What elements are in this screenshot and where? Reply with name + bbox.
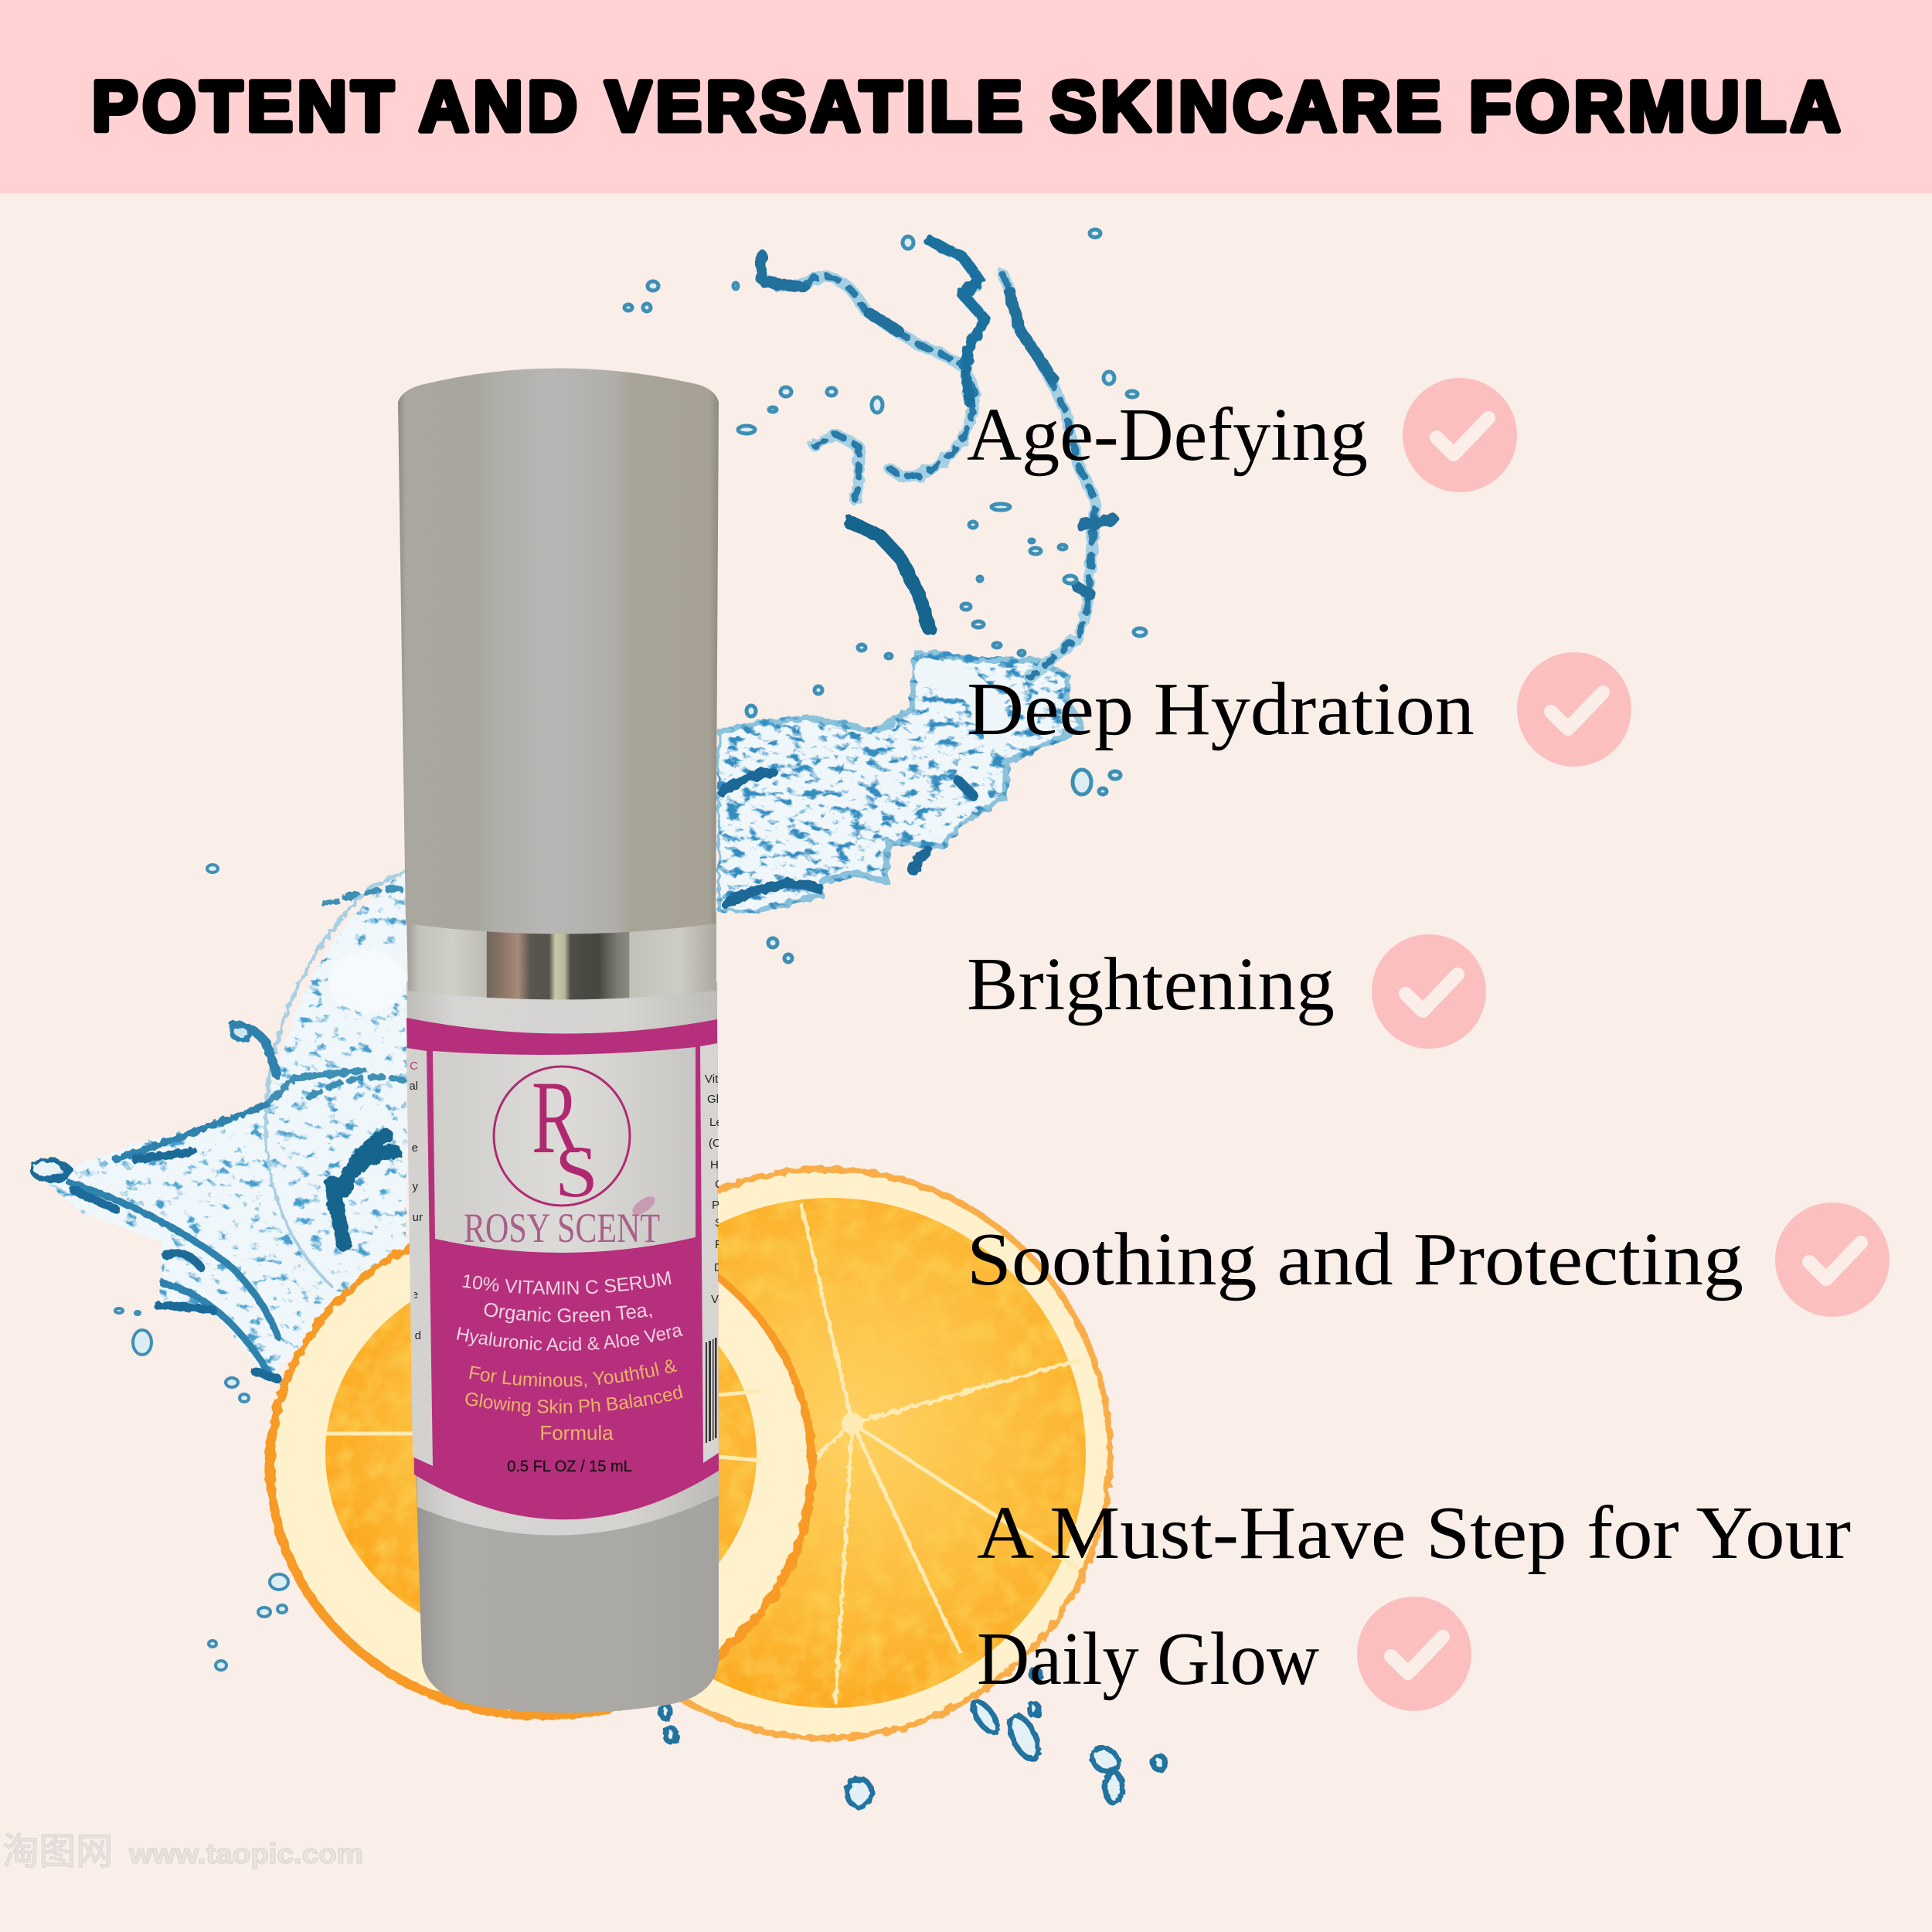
side strip small print: (Orga — [709, 1137, 739, 1150]
side strip small print: ne — [405, 1141, 418, 1155]
title: POTENT AND VERSATILE SKINCARE FORMULA — [92, 67, 1845, 146]
water droplets: left — [115, 865, 288, 1670]
side strip small print: Hyal — [710, 1158, 733, 1172]
barcode — [706, 1338, 717, 1443]
benefit: Brightening: Brightening — [967, 943, 1335, 1026]
benefit: Soothing and Protecting — [967, 1202, 1889, 1317]
check icon — [1403, 378, 1517, 492]
side strip small print: read — [398, 1329, 421, 1342]
water splash: left bubble — [27, 870, 406, 1383]
bottle body — [406, 981, 719, 1536]
benefit: A Must-Have Step for Your Daily Glow: A Must-Have Step for Your — [977, 1492, 1851, 1575]
bottle cap — [398, 368, 719, 934]
check icon — [1357, 1597, 1471, 1711]
side strip small print: DM — [714, 1261, 732, 1274]
header band — [0, 0, 1932, 193]
label copy: benefit: Glowing Skin Ph Balanced — [465, 1385, 683, 1416]
check icon — [1517, 652, 1631, 767]
label copy: benefit: For Luminous, Youthful & — [469, 1359, 677, 1388]
side strip small print: al — [409, 1080, 418, 1093]
orange slice: left — [266, 1213, 816, 1720]
benefit: Deep Hydration — [967, 652, 1631, 767]
side strip small print: Pant — [712, 1199, 736, 1212]
label copy: benefit: Formula — [539, 1421, 614, 1444]
orange slice: right — [538, 1166, 1113, 1741]
label copy: ingredients — [456, 1303, 683, 1351]
bottle base — [416, 1468, 719, 1713]
watermark — [2, 1832, 363, 1872]
watermark: www.taopic.com — [128, 1838, 363, 1869]
side strip small print — [410, 1062, 719, 1339]
label copy: product name: 10% VITAMIN C SERUM — [462, 1271, 671, 1295]
brand logo — [494, 1060, 658, 1218]
side strip small print: Ph — [715, 1238, 729, 1251]
benefit: A Must-Have Step for Your Daily Glow — [977, 1492, 1851, 1711]
side strip small print: Glyce — [707, 1093, 736, 1106]
label copy: volume: 0.5 FL OZ / 15 mL — [507, 1458, 632, 1475]
benefit: Deep Hydration: Deep Hydration — [967, 668, 1475, 751]
label copy: ingredients: Organic Green Tea, — [484, 1303, 652, 1323]
check icon — [1775, 1202, 1889, 1317]
brand name: ROSY SCENT — [464, 1205, 660, 1251]
side strip small print: er your — [386, 1211, 423, 1224]
label copy: benefit — [465, 1359, 683, 1444]
bottle collar — [406, 912, 716, 1000]
side strip small print: ne — [405, 1288, 418, 1301]
check icon — [1372, 934, 1486, 1049]
label left strip — [406, 1048, 433, 1466]
water droplets: top — [624, 230, 1146, 962]
side strip small print: Vitam — [705, 1073, 734, 1086]
brand logo: R — [532, 1060, 580, 1175]
side strip small print: Si — [715, 1216, 725, 1230]
label right strip — [700, 1043, 719, 1463]
side strip small print: min C — [388, 1060, 418, 1073]
label — [406, 1018, 719, 1519]
water droplets: bottom — [661, 1669, 1165, 1807]
side strip small print: Leaf — [709, 1116, 733, 1129]
serum bottle — [398, 368, 719, 1713]
benefit: Brightening — [967, 934, 1486, 1049]
water splash: top arc — [717, 241, 1113, 912]
benefit: Age-Defying — [967, 378, 1517, 492]
side strip small print: ly — [410, 1180, 418, 1193]
watermark: 淘图网 — [2, 1832, 113, 1872]
benefit: Soothing and Protecting: Soothing and Protecting — [967, 1218, 1743, 1301]
side strip small print: Ci — [715, 1178, 726, 1191]
side strip small print: Vega — [711, 1293, 738, 1306]
brand logo: S — [555, 1131, 598, 1213]
label white panel — [433, 1047, 696, 1253]
label copy: ingredients: Hyaluronic Acid & Aloe Vera — [456, 1326, 683, 1351]
benefit: A Must-Have Step for Your Daily Glow: Daily Glow — [977, 1617, 1319, 1701]
benefit: Age-Defying: Age-Defying — [967, 393, 1368, 477]
